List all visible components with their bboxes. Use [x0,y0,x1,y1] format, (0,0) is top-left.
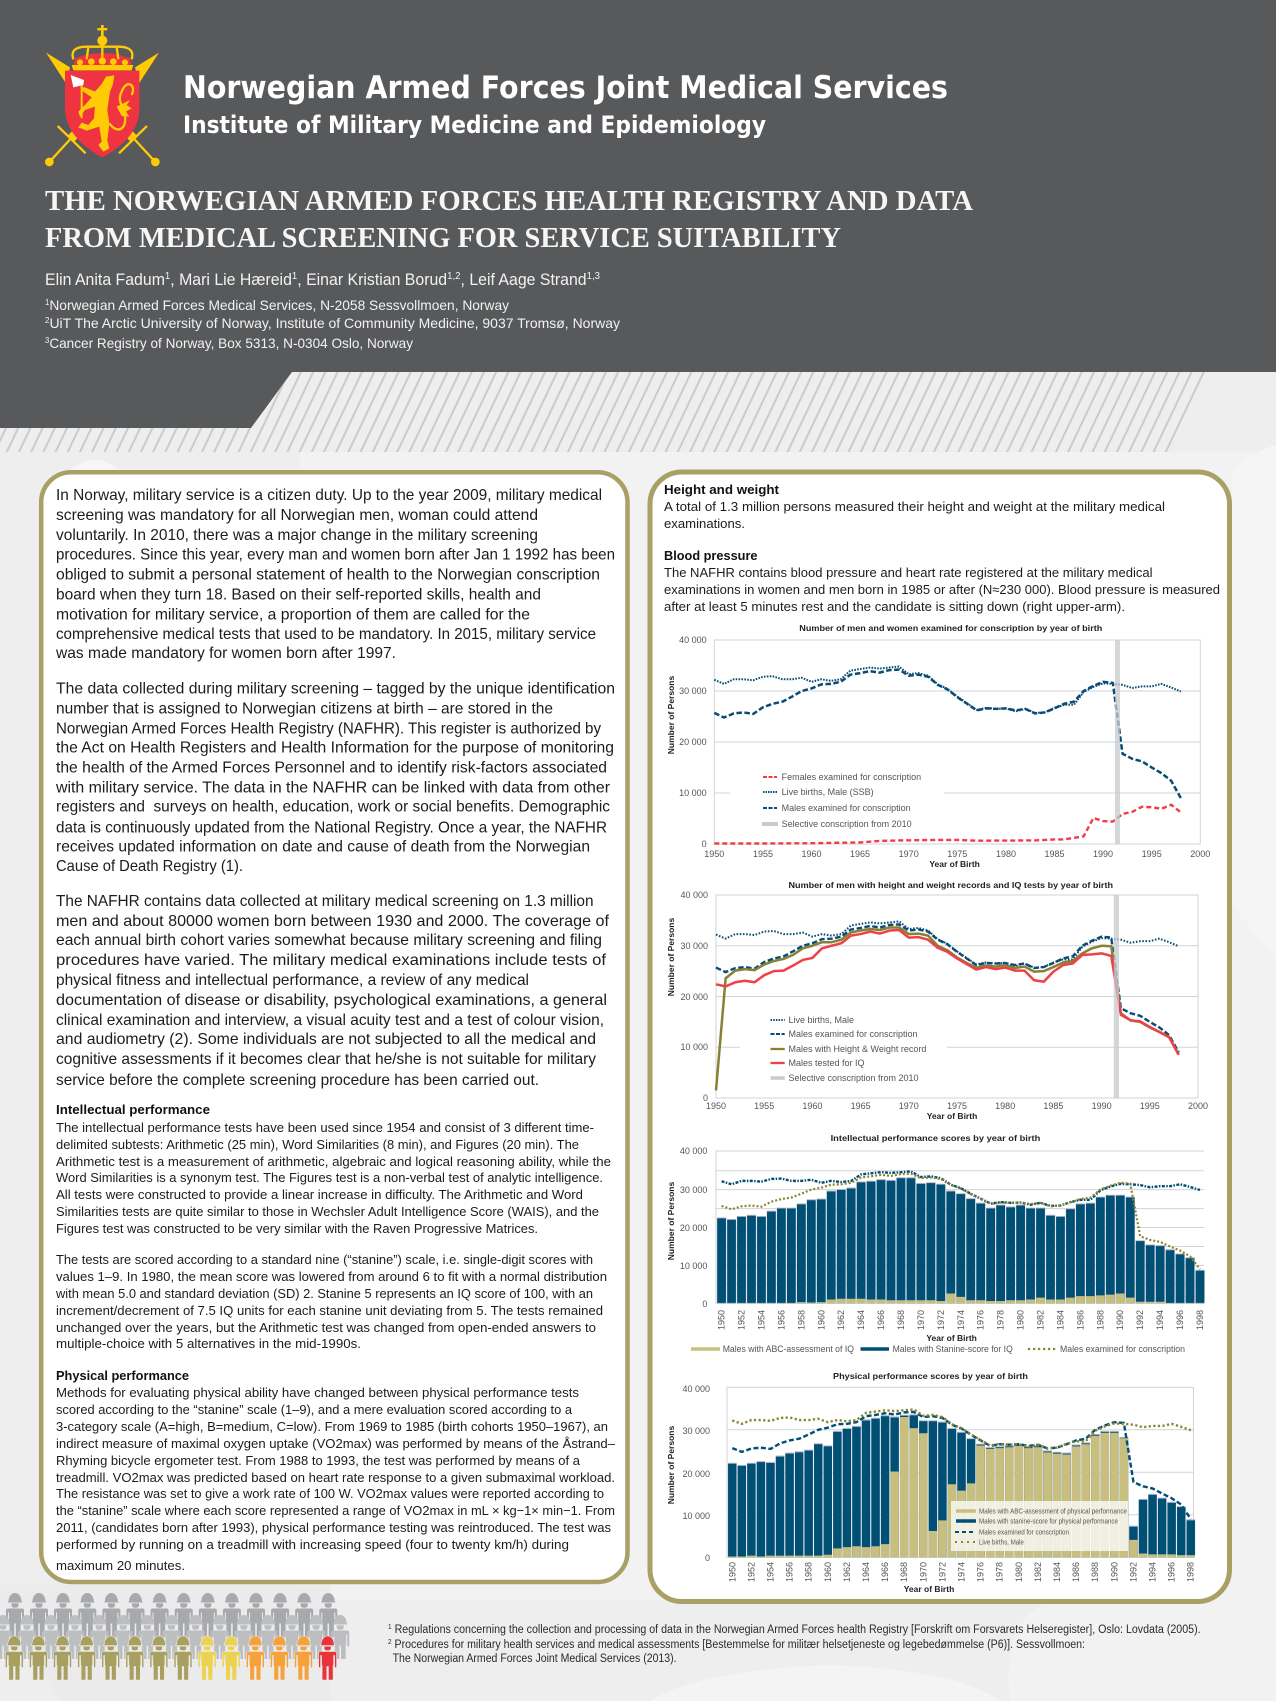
bar chart: physical performance scores: 1988 [1090,1562,1100,1582]
footnotes: Procedures for military health services and medical assessments [Bestemmelse for militær helsetjeneste og legebedømmelse (P6)]. Sessvollmoen: [392,1639,1085,1651]
text block: data collection: registers and surveys on health, education, work or social benefits. Demographic [56,799,610,816]
bar chart: physical performance scores: 1980 [1014,1562,1024,1582]
icon: Norwegian Armed Forces coat of arms [45,25,160,166]
text block: introduction: obliged to submit a personal statement of health to the Norwegian conscription [56,566,600,583]
text block: blood pressure: The NAFHR contains blood pressure and heart rate registered at the military medical [664,565,1153,580]
text block: introduction: In Norway, military service is a citizen duty. Up to the year 2009, military medical [56,487,602,504]
line chart: men and women examined for conscription: 1950 [704,849,724,859]
line chart: height and weight records and IQ tests: 1950 [706,1101,726,1111]
line chart: height and weight records and IQ tests [666,880,1208,1121]
bar chart: intellectual performance scores: 1952 [736,1310,746,1330]
text block: intellectual performance: values 1–9. In 1980, the mean score was lowered from around 6 to fit with a normal distribution [56,1269,607,1284]
text block: data collection: Cause of Death Registry (1). [56,858,243,875]
legend [730,768,944,830]
text block: blood pressure [664,548,1220,614]
bar chart: intellectual performance scores: 1998 [1195,1310,1205,1330]
text block: data collection: The data collected during military screening – tagged by the unique identification [56,680,615,697]
bar chart: physical performance scores: 10 000 [682,1511,710,1521]
panel: right column with charts [650,472,1230,1602]
bar chart: intellectual performance scores: 1956 [776,1310,786,1330]
text block: intellectual performance: Intellectual performance [56,1102,210,1117]
line chart: height and weight records and IQ tests: 1970 [899,1101,919,1111]
bar chart: physical performance scores: Year of Birth [904,1584,954,1594]
legend: Live births, Male [788,1015,854,1025]
bar chart: intellectual performance scores: 1978 [996,1310,1006,1330]
bar chart: intellectual performance scores: 40 000 [680,1146,707,1156]
authors: , Leif Aage Strand [461,271,587,289]
line chart: men and women examined for conscription: 10 000 [679,788,707,798]
text block: registry contents: and audiometry (2). Some individuals are not subjected to all the medical and [56,1031,596,1048]
text block: data collection: the Act on Health Registers and Health Information for the purpose of monitoring [56,739,614,756]
bar chart: physical performance scores: 1976 [976,1562,986,1582]
text block: registry contents: physical fitness and intellectual performance, a review of any medical [56,972,529,989]
footnotes [388,1624,1201,1665]
text block: physical performance: Physical performance [56,1368,189,1383]
bar chart: intellectual performance scores: Intellectual performance scores by year of birth [831,1133,1040,1143]
line chart: men and women examined for conscription: Number of men and women examined for conscription by year of birth [799,623,1102,633]
line chart: height and weight records and IQ tests: 10 000 [680,1042,708,1052]
line chart: height and weight records and IQ tests: 1975 [947,1101,967,1111]
authors: , Einar Kristian Borud [297,271,447,289]
line chart: men and women examined for conscription: 1975 [947,849,967,859]
legend: Selective conscription from 2010 [782,819,912,829]
legend: Males examined for conscription [1060,1344,1185,1354]
text block: registry contents: clinical examination and interview, a visual acuity test and a test of colour vision, [56,1012,604,1029]
bar chart: physical performance scores: 1956 [785,1562,795,1582]
text block: blood pressure: after at least 5 minutes rest and the candidate is sitting down (right upper-arm). [664,599,1125,614]
bar chart: intellectual performance scores: 1996 [1175,1310,1185,1330]
text block: intellectual performance: Word Similarities is a synonym test. The Figures test is a non-verbal test of analytic intelligence. [56,1170,603,1185]
text block: data collection: Norwegian Armed Forces Health Registry (NAFHR). This register is authorized by [56,720,601,737]
legend [740,1012,947,1084]
bar chart: physical performance scores: 1978 [995,1562,1005,1582]
heading: institution name: Institute of Military Medicine and Epidemiology [183,111,766,139]
bar chart: intellectual performance scores: 1966 [876,1310,886,1330]
panel: left text column [41,472,627,1582]
text block: intellectual performance: The intellectual performance tests have been used since 1954 and consist of 3 different time- [56,1120,594,1135]
bar chart: intellectual performance scores: 1984 [1055,1310,1065,1330]
text block: registry contents: procedures have varied. The military medical examinations include tests of [56,952,607,969]
affiliations: UiT The Arctic University of Norway, Institute of Community Medicine, 9037 Tromsø, Norway [49,315,620,331]
affiliations: Norwegian Armed Forces Medical Services, N-2058 Sessvollmoen, Norway [49,297,509,313]
bar chart: physical performance scores: 1950 [727,1562,737,1582]
bar chart: physical performance scores: 1968 [899,1562,909,1582]
text block: height and weight: examinations. [664,516,745,531]
legend: Females examined for conscription [782,772,921,782]
bar chart: intellectual performance scores: 1982 [1036,1310,1046,1330]
authors: 1 [165,271,171,282]
line chart: height and weight records and IQ tests: 30 000 [680,941,708,951]
legend: Males tested for IQ [788,1058,865,1068]
text block: physical performance: Rhyming bicycle ergometer test. From 1988 to 1993, the test was performed by means of a [56,1453,581,1468]
legend: Males with stanine-score for physical performance [979,1518,1118,1526]
soldiers: back row [6,1593,337,1637]
legend: Males examined for conscription [788,1029,918,1039]
line chart: men and women examined for conscription: 0 [702,839,707,849]
text block: height and weight: Height and weight [664,482,780,497]
bar chart: intellectual performance scores: 1994 [1155,1310,1165,1330]
text block: registry contents: The NAFHR contains data collected at military medical screening on 1.3 million [56,893,594,910]
text block: physical performance: Methods for evaluating physical ability have changed between physical performance tests [56,1385,579,1400]
title: FROM MEDICAL SCREENING FOR SERVICE SUITABILITY [45,222,841,254]
marker: selective conscription band [1115,640,1120,844]
text block: data collection: receives updated information on date and cause of death from the Norwegian [56,838,590,855]
bar chart: intellectual performance scores: 1950 [717,1310,727,1330]
bar chart: physical performance scores: 20 000 [682,1469,710,1479]
text block: registry contents: men and about 80000 women born between 1930 and 2000. The coverage of [56,913,610,930]
heading: institution name [183,70,948,139]
bar chart: intellectual performance scores: 1958 [796,1310,806,1330]
bar chart: intellectual performance scores: 1960 [816,1310,826,1330]
text block: intellectual performance: multiple-choice with 5 alternatives in the mid-1990s. [56,1336,361,1351]
line chart: men and women examined for conscription: 1990 [1093,849,1113,859]
footnotes: 2 [388,1639,392,1646]
bar chart: physical performance scores: 1966 [880,1562,890,1582]
text block: intellectual performance: Similarities tests are quite similar to those in Wechsler Adult Intelligence Score (WAIS), and the [56,1204,599,1219]
line chart: height and weight records and IQ tests: 1985 [1043,1101,1063,1111]
text block: physical performance: performed by running on a treadmill with increasing speed (four to twenty km/h) during [56,1537,569,1552]
line chart: height and weight records and IQ tests: 1980 [995,1101,1015,1111]
line chart: height and weight records and IQ tests: Number of men with height and weight records and IQ tests by year of birth [788,880,1113,890]
legend [951,1501,1128,1551]
bar chart: intellectual performance scores: 1954 [756,1310,766,1330]
bar chart: intellectual performance scores: 10 000 [680,1261,707,1271]
bar chart: intellectual performance scores: Year of Birth [926,1333,977,1343]
title [45,185,973,254]
legend: Males examined for conscription [782,803,911,813]
bar chart: physical performance scores: 1960 [823,1562,833,1582]
affiliations: 3 [45,336,50,345]
line chart: men and women examined for conscription: 1960 [801,849,822,859]
bar chart: physical performance scores: 1954 [766,1562,776,1582]
text block: physical performance: the “stanine” scale where each score represented a range of VO2max in mL × kg−1× min−1. From [56,1503,615,1518]
text block: intellectual performance: All tests were constructed to provide a linear increase in difficulty. The Arithmetic and Word [56,1187,583,1202]
line chart: height and weight records and IQ tests: 0 [703,1093,708,1103]
affiliations: 2 [45,316,50,325]
bar chart: intellectual performance scores: 1962 [836,1310,846,1330]
bar chart: physical performance scores: 1952 [746,1562,756,1582]
bar chart: physical performance scores: 30 000 [682,1426,710,1436]
line chart: height and weight records and IQ tests: 20 000 [680,992,708,1002]
bar chart: physical performance scores: 1958 [804,1562,814,1582]
line chart: height and weight records and IQ tests: 1990 [1092,1101,1112,1111]
footnotes: 1 [388,1624,392,1631]
bar chart: intellectual performance scores: 1970 [916,1310,926,1330]
bar chart: physical performance scores: 1994 [1148,1562,1158,1582]
bar chart: intellectual performance scores: 1964 [856,1310,866,1330]
text block: height and weight: A total of 1.3 million persons measured their height and weight at the military medical [664,499,1165,514]
bar chart: intellectual performance scores: 1976 [976,1310,986,1330]
line chart: height and weight records and IQ tests: Year of Birth [927,1111,977,1121]
text block: blood pressure: Blood pressure [664,548,758,563]
title: THE NORWEGIAN ARMED FORCES HEALTH REGISTRY AND DATA [45,185,973,217]
legend: Males with ABC-assessment of physical performance [979,1508,1127,1516]
text block: data collection: the health of the Armed Forces Personnel and to identify risk-factors associated [56,759,607,776]
authors: 1,3 [587,271,600,282]
bar chart: physical performance scores: 1998 [1186,1562,1196,1582]
line chart: men and women examined for conscription: 40 000 [679,635,707,645]
text block: intellectual performance: with mean 5.0 and standard deviation (SD) 2. Stanine 5 represents an IQ score of 100, with an [55,1286,593,1301]
bar chart: intellectual performance scores: 1980 [1016,1310,1026,1330]
bar chart: physical performance scores: 1992 [1128,1562,1138,1582]
text block: introduction: board when they turn 18. Based on their self-reported skills, health and [56,586,541,603]
text block: registry contents: documentation of disease or disability, psychological examinations, a general [56,992,607,1009]
text block: physical performance [56,1368,616,1573]
text block: physical performance: maximum 20 minutes. [56,1558,185,1573]
bar chart: physical performance scores: 1970 [918,1562,928,1582]
diagonal stripe band [0,372,1206,452]
bar chart: physical performance scores: Physical performance scores by year of birth [833,1371,1028,1381]
legend [691,1344,1185,1354]
line chart: men and women examined for conscription [666,623,1210,869]
footnotes: Regulations concerning the collection and processing of data in the Norwegian Armed Forces health Registry [Forskrift om Forsvarets Helseregister], Oslo: Lovdata (2005). [392,1624,1201,1636]
text block: introduction: screening was mandatory for all Norwegian men, woman could attend [56,507,538,524]
affiliations: 1 [45,298,50,307]
line chart: height and weight records and IQ tests: 40 000 [680,890,708,900]
bar chart: intellectual performance scores: 1974 [956,1310,966,1330]
authors: 1,2 [447,271,461,282]
legend: Selective conscription from 2010 [788,1073,919,1083]
text block: intellectual performance: delimited subtests: Arithmetic (25 min), Word Similarities (8 min), and Figures (20 min). The [56,1137,579,1152]
line chart: men and women examined for conscription: 1995 [1142,849,1162,859]
legend: Live births, Male (SSB) [782,787,874,797]
bar chart: intellectual performance scores: Number of Persons [666,1182,676,1260]
affiliations [45,297,620,351]
bar chart: physical performance scores: 0 [705,1553,710,1563]
text block: registry contents: cognitive assessments if it becomes clear that he/she is not suitable for military [56,1051,596,1068]
bar chart: intellectual performance scores: 1988 [1095,1310,1105,1330]
legend: Males examined for conscription [979,1530,1069,1536]
text block: data collection [55,680,615,875]
line chart: height and weight records and IQ tests: 2000 [1188,1101,1208,1111]
line chart: height and weight records and IQ tests: Number of Persons [666,918,676,996]
line chart: men and women examined for conscription: 20 000 [679,737,707,747]
text block: physical performance: treadmill. VO2max was predicted based on heart rate response to a given submaximal workload. [56,1470,615,1485]
text block: intellectual performance: Arithmetic test is a measurement of arithmetic, algebraic and logical reasoning ability, while the [56,1154,611,1169]
text block: introduction: voluntarily. In 2010, there was a major change in the military screening [56,527,538,544]
bar chart: physical performance scores: Number of Persons [666,1426,676,1504]
line chart: height and weight records and IQ tests: 1955 [754,1101,774,1111]
authors: 1 [292,271,298,282]
text block: data collection: data is continuously updated from the National Registry. Once a year, the NAFHR [56,819,607,836]
text block: physical performance: 2011, (candidates born after 1993), physical performance testing was reintroduced. The test was [56,1520,611,1535]
bar chart: physical performance scores: 1972 [937,1562,947,1582]
line chart: men and women examined for conscription: 1970 [899,849,919,859]
bar chart: intellectual performance scores: 0 [702,1299,707,1309]
line chart: men and women examined for conscription: Number of Persons [666,676,676,754]
line chart: men and women examined for conscription: 1965 [850,849,870,859]
heading: institution name: Norwegian Armed Forces Joint Medical Services [183,70,948,106]
bar chart: intellectual performance scores: 1992 [1135,1310,1145,1330]
legend: Males with Stanine-score for IQ [893,1344,1013,1354]
bar chart: physical performance scores: 1986 [1071,1562,1081,1582]
bar chart: physical performance scores: 1982 [1033,1562,1043,1582]
text block: physical performance: The resistance was set to give a work rate of 100 W. VO2max values were reported according to [56,1486,604,1501]
header band [0,0,1276,428]
line chart: men and women examined for conscription: 30 000 [679,686,707,696]
text block: introduction [55,487,615,662]
text block: intellectual performance: The tests are scored according to a standard nine (“stanine”) scale, i.e. single-digit scores with [56,1252,593,1267]
bar chart: intellectual performance scores [666,1133,1205,1354]
text block: registry contents [56,893,610,1089]
legend: Males with ABC-assessment of IQ [723,1344,854,1354]
bar chart: intellectual performance scores: 1986 [1075,1310,1085,1330]
text block: introduction: procedures. Since this year, every man and women born after Jan 1 1992 has been [56,546,615,563]
text block: physical performance: 3-category scale (A=high, B=medium, C=low). From 1969 to 1985 (birth cohorts 1950–1967), an [56,1419,608,1434]
bar chart: physical performance scores: 1984 [1052,1562,1062,1582]
bar chart: physical performance scores: 1990 [1109,1562,1119,1582]
text block: registry contents: service before the complete screening procedure has been carried out. [56,1072,539,1089]
marker: selective conscription band [1114,895,1119,1098]
soldiers: middle row [0,1615,349,1659]
text block: physical performance: scored according to the “stanine” scale (1–9), and a mere evaluation scored according to a [56,1402,573,1417]
bar chart: physical performance scores: 1964 [861,1562,871,1582]
text block: introduction: comprehensive medical tests that used to be mandatory. In 2015, military service [56,626,596,643]
text block: registry contents: each annual birth cohort varies somewhat because military screening and filing [56,932,602,949]
text block: intellectual performance: increment/decrement of 7.5 IQ units for each stanine unit deviating from 5. The tests remained [56,1303,603,1318]
text block: physical performance: indirect measure of maximal oxygen uptake (VO2max) was performed by means of the Åstrand– [56,1436,616,1451]
text block: height and weight [664,482,1165,531]
line chart: men and women examined for conscription: 1980 [996,849,1016,859]
authors: Elin Anita Fadum [45,271,170,289]
bar chart: intellectual performance scores: 1968 [896,1310,906,1330]
bar chart: physical performance scores: 1996 [1167,1562,1177,1582]
text block: intellectual performance [55,1102,611,1351]
text block: introduction: was made mandatory for women born after 1997. [55,645,396,662]
line chart: men and women examined for conscription: 2000 [1190,849,1210,859]
text block: blood pressure: examinations in women and men born in 1985 or after (N≈230 000). Blood pressure is measured [664,582,1220,597]
text block: data collection: number that is assigned to Norwegian citizens at birth – are stored in the [56,700,553,717]
line chart: men and women examined for conscription: 1985 [1044,849,1065,859]
legend: Live births, Male [979,1540,1024,1546]
line chart: height and weight records and IQ tests: 1960 [802,1101,822,1111]
text block: intellectual performance: unchanged over the years, but the Arithmetic test was changed from open-ended answers to [56,1320,596,1335]
bar chart: physical performance scores: 1974 [956,1562,966,1582]
text block: intellectual performance: Figures test was constructed to be very similar with the Raven Progressive Matrices. [56,1221,538,1236]
icon: rows of soldiers [0,1593,349,1680]
bar chart: physical performance scores [666,1371,1196,1594]
bar chart: intellectual performance scores: 1972 [936,1310,946,1330]
line chart: height and weight records and IQ tests: 1965 [851,1101,871,1111]
bar chart: intellectual performance scores: 1990 [1115,1310,1125,1330]
line chart: men and women examined for conscription: Year of Birth [929,859,980,869]
text block: data collection: with military service. The data in the NAFHR can be linked with data from other [55,779,611,796]
bar chart: physical performance scores: 1962 [842,1562,852,1582]
bar chart: intellectual performance scores: 30 000 [680,1185,707,1195]
line chart: men and women examined for conscription: 1955 [753,849,773,859]
bar chart: intellectual performance scores: 20 000 [680,1223,707,1233]
authors: , Mari Lie Hæreid [170,271,292,289]
footnotes: The Norwegian Armed Forces Joint Medical Services (2013). [393,1653,677,1665]
soldiers: front row [5,1636,337,1680]
line chart: height and weight records and IQ tests: 1995 [1140,1101,1160,1111]
bar chart: physical performance scores: 40 000 [682,1384,710,1394]
text block: introduction: motivation for military service, a proportion of them are called for the [56,606,530,623]
affiliations: Cancer Registry of Norway, Box 5313, N-0304 Oslo, Norway [49,335,413,351]
legend: Males with Height & Weight record [788,1044,926,1054]
